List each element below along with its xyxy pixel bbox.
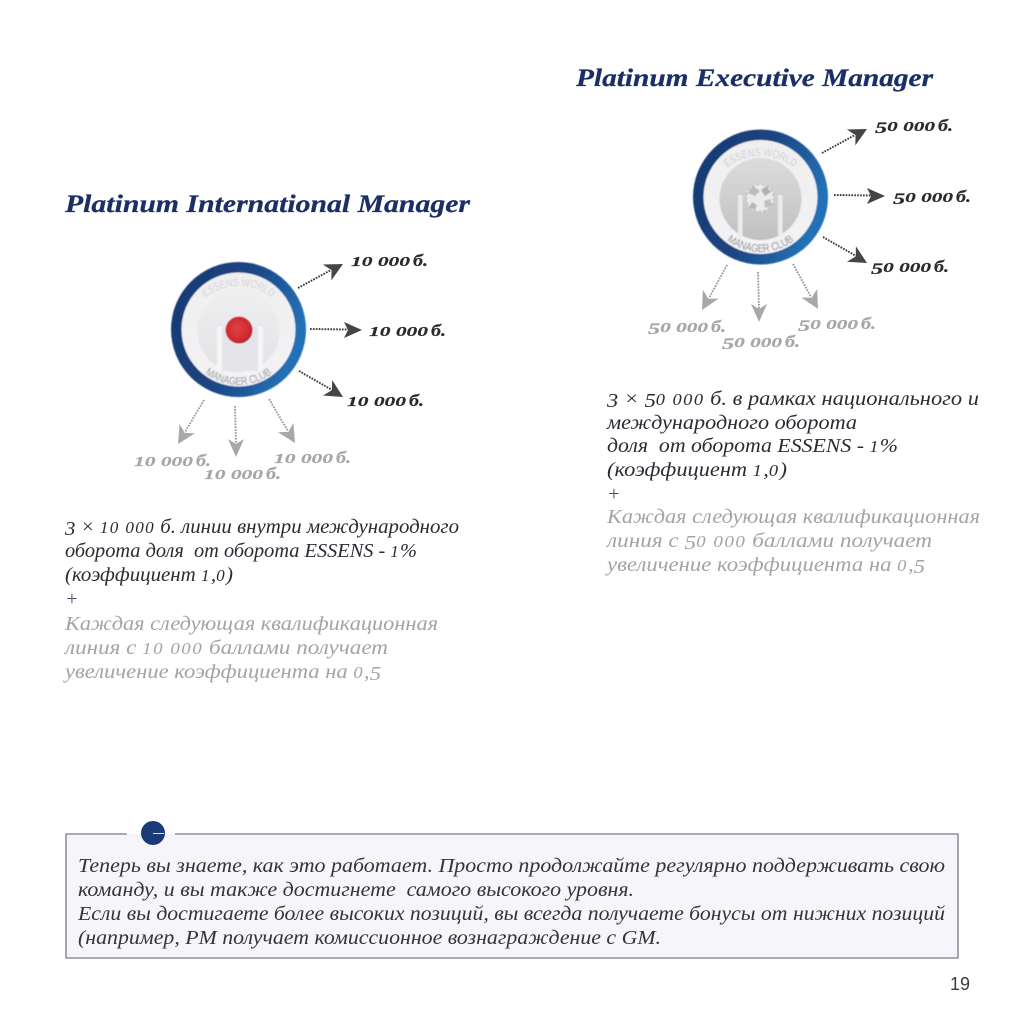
- medallion with diamond: MANAGER CLUB: [727, 234, 794, 252]
- callout text: Если вы достигаете более высоких позиций, вы всегда получаете бонусы от нижних позиций: [77, 904, 945, 925]
- label: [351, 251, 428, 270]
- label: [871, 257, 949, 278]
- label: б.: [938, 116, 953, 135]
- callout box: [66, 821, 958, 958]
- label: 10 000: [351, 255, 410, 270]
- medallion with diamond: [692, 128, 829, 266]
- label: 5: [893, 191, 905, 208]
- label: 10 000: [369, 325, 428, 340]
- label: 0 000: [810, 318, 858, 333]
- text block: International Manager conditions: оборота доля от оборота ESSENS - 1%: [65, 540, 417, 562]
- text block: Executive Manager conditions: ×: [618, 388, 645, 410]
- label: 5: [722, 336, 734, 353]
- text block: Executive Manager conditions: 5: [685, 532, 696, 554]
- label: 10 000: [134, 455, 193, 470]
- label: [722, 332, 800, 353]
- label: [347, 391, 424, 410]
- text block: Executive Manager conditions: +: [607, 483, 620, 505]
- arrow down-left: [694, 265, 727, 314]
- label: б.: [336, 448, 351, 467]
- text block: Executive Manager conditions: международного оборота: [606, 412, 857, 434]
- medallion with ruby: MANAGER CLUB: [205, 368, 272, 386]
- callout text: (например, PM получает комиссионное вознаграждение с GM.: [78, 928, 661, 949]
- text block: Executive Manager conditions: 3: [606, 390, 618, 412]
- arrow right: [310, 322, 362, 338]
- label: 10 000: [347, 395, 406, 410]
- text block: Executive Manager conditions: баллами получает: [751, 530, 906, 552]
- label: 0 000: [887, 120, 935, 135]
- arrow down-right: [299, 371, 348, 405]
- label: 10 000: [274, 452, 333, 467]
- callout text: [77, 856, 945, 949]
- label: б.: [266, 464, 281, 483]
- diagram: Platinum International Manager: [134, 251, 446, 483]
- page number: 19: [950, 974, 970, 994]
- text block: International Manager conditions: 3: [64, 518, 75, 540]
- text block: Executive Manager conditions: 0 000: [696, 532, 746, 551]
- icon: blue circle: [141, 821, 165, 845]
- label: б.: [413, 251, 428, 270]
- text block: International Manager conditions: [63, 516, 459, 685]
- text block: Executive Manager conditions: доля от оборота ESSENS - 1%: [607, 435, 898, 457]
- medallion with ruby: [170, 261, 307, 398]
- label: 0 000: [660, 321, 708, 336]
- callout text: Теперь вы знаете, как это работает. Просто продолжайте регулярно поддерживать свою: [78, 856, 945, 877]
- label: [204, 464, 281, 483]
- heading: Platinum International Manager: Platinum International Manager: [64, 191, 470, 218]
- arrow right: [834, 188, 885, 204]
- label: 0 000: [905, 191, 953, 206]
- text block: International Manager conditions: ×: [75, 516, 100, 538]
- label: [875, 116, 953, 137]
- text block: Executive Manager conditions: линия с: [607, 530, 669, 552]
- medallion with diamond: ESSENS WORLD: [723, 148, 797, 167]
- text block: Executive Manager conditions: 0 000: [656, 390, 704, 409]
- label: б.: [431, 321, 446, 340]
- label: 0 000: [883, 261, 931, 276]
- medallion with ruby: ESSENS WORLD: [202, 278, 275, 297]
- label: б.: [711, 317, 726, 336]
- text block: International Manager conditions: линия с 10 000 баллами получает: [64, 637, 388, 659]
- arrow down-right: [823, 237, 872, 271]
- text block: Executive Manager conditions: б. в рамках национального и: [709, 388, 949, 410]
- label: 0 000: [734, 336, 782, 351]
- label: б.: [861, 314, 876, 333]
- label: [648, 317, 726, 338]
- text block: Executive Manager conditions: Каждая следующая квалификационная: [606, 506, 980, 528]
- text block: International Manager conditions: 5: [370, 663, 381, 685]
- text block: Executive Manager conditions: 5: [645, 390, 656, 412]
- heading: Platinum Executive Manager: Platinum Executive Manager: [575, 65, 933, 92]
- label: 10 000: [204, 468, 263, 483]
- label: б.: [196, 451, 211, 470]
- arrow up-right: [298, 256, 347, 288]
- text block: Executive Manager conditions: 5: [914, 556, 925, 578]
- label: [893, 187, 971, 208]
- arrow down-right grey: [269, 399, 303, 448]
- text block: International Manager conditions: +: [65, 588, 78, 610]
- label: б.: [785, 332, 800, 351]
- arrow down-left: [170, 400, 204, 449]
- text block: Executive Manager conditions: (коэффициент 1,0): [607, 459, 787, 481]
- label: [134, 451, 211, 470]
- text block: International Manager conditions: увеличение коэффициента на 0,: [65, 661, 369, 683]
- label: б.: [956, 187, 971, 206]
- arrow down-right grey: [793, 264, 826, 313]
- label: 5: [648, 321, 660, 338]
- label: 5: [875, 120, 887, 137]
- arrow down: [751, 272, 767, 322]
- callout text: команду, и вы также достигнете самого высокого уровня.: [78, 880, 634, 901]
- label: 5: [871, 261, 883, 278]
- text block: International Manager conditions: (коэффициент 1,0): [65, 564, 233, 586]
- text block: International Manager conditions: 10 000 б. линии внутри международного: [100, 516, 447, 538]
- label: б.: [934, 257, 949, 276]
- label: [369, 321, 446, 340]
- text block: Executive Manager conditions: [605, 388, 980, 578]
- arrow down: [228, 406, 244, 457]
- label: б.: [409, 391, 424, 410]
- arrow up-right: [822, 121, 871, 153]
- diagram: Platinum Executive Manager: [648, 116, 971, 353]
- label: 5: [798, 318, 810, 335]
- label: [798, 314, 876, 335]
- text block: International Manager conditions: Каждая следующая квалификационная: [64, 613, 438, 635]
- label: [274, 448, 351, 467]
- text block: Executive Manager conditions: увеличение коэффициента на 0,: [607, 554, 913, 576]
